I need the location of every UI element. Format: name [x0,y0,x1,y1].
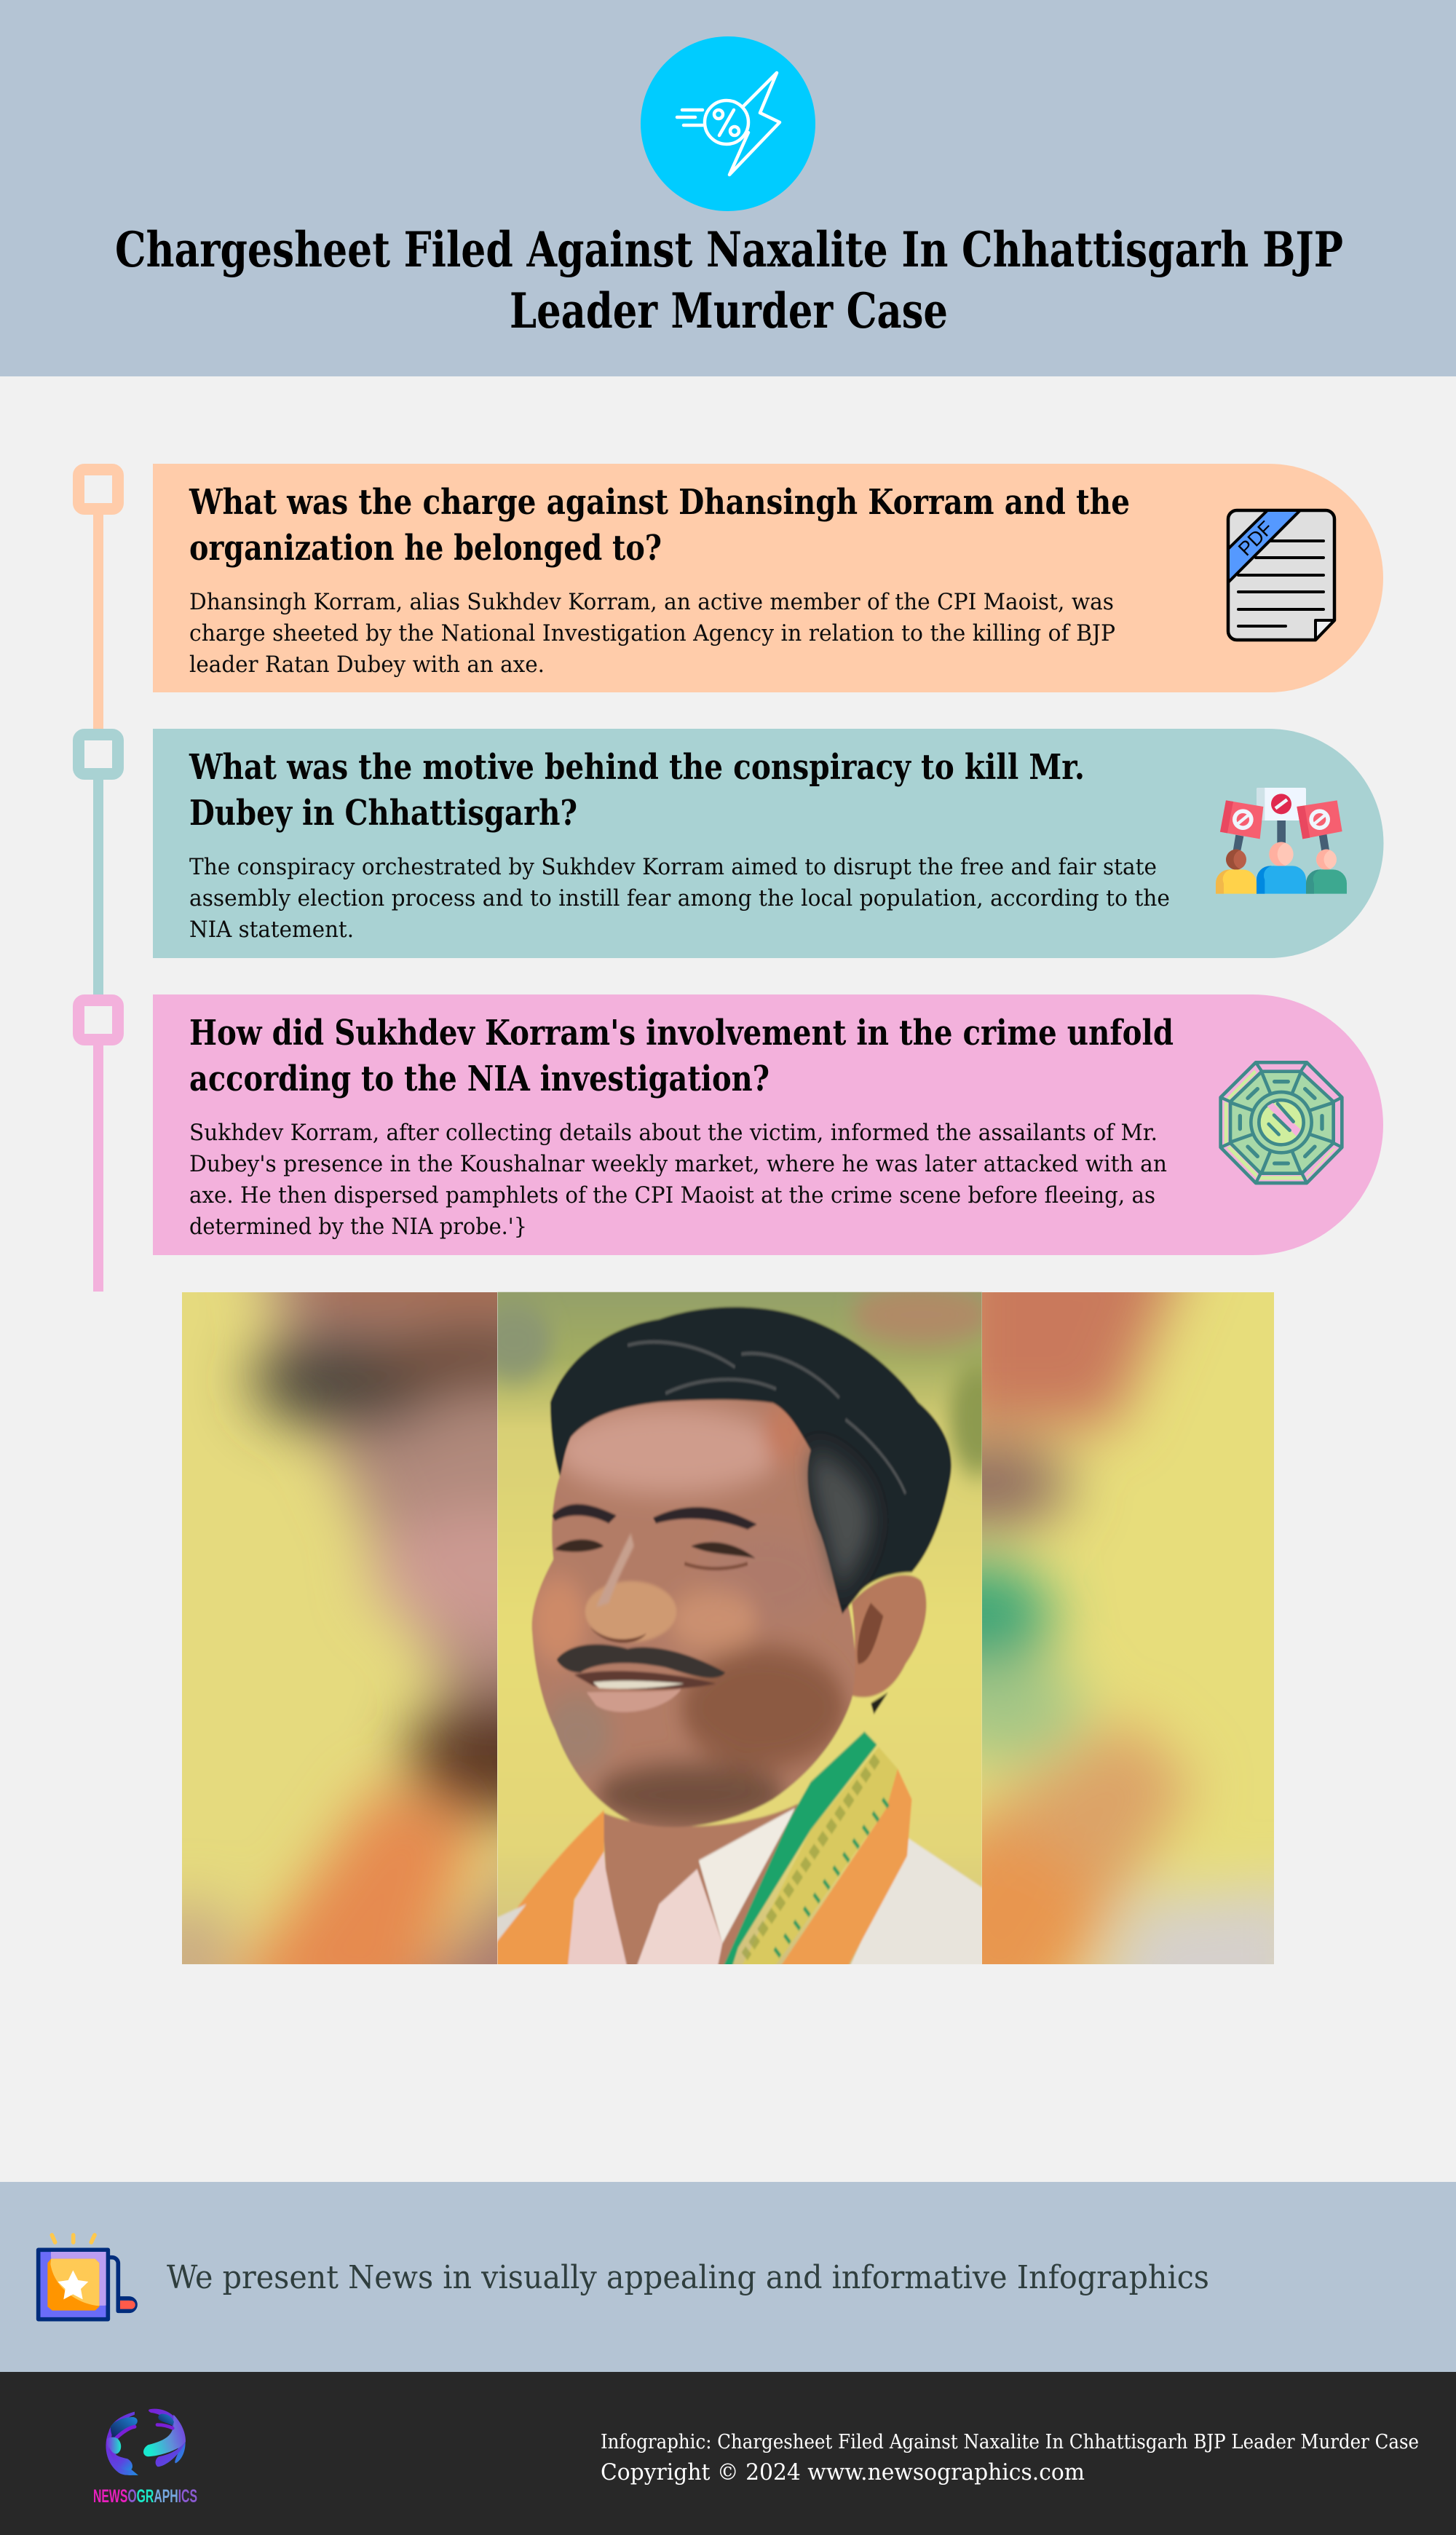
tagline band [0,2182,1456,2372]
header band [0,0,1456,376]
title: Leader Murder Case [510,282,948,339]
text: answer 2: NIA statement. [189,917,354,943]
icon: box with star [39,2235,135,2320]
mustache [557,1644,726,1678]
panel: motive [153,729,1383,958]
photo right blurred fill [982,1292,1274,1964]
heading: question 3 [189,1013,1174,1099]
photo centre portrait [497,1292,982,1964]
text: answer 1: leader Ratan Dubey with an axe. [189,652,545,678]
panel: charge [153,464,1383,692]
title [115,221,1343,339]
ear [847,1575,926,1697]
logo: newsographics [93,2409,197,2507]
footer text [601,2431,1419,2485]
text: answer 3 [189,1120,1167,1240]
neck [602,1803,798,1982]
panel: involvement [153,994,1383,1255]
nose [585,1581,676,1642]
heading: question 3: How did Sukhdev Korram's involvement in the crime unfold [189,1013,1174,1053]
text: answer 2: The conspiracy orchestrated by Sukhdev Korram aimed to disrupt the free and fair state [189,854,1157,880]
text: answer 2 [189,854,1170,943]
footer text: Copyright © 2024 www.newsographics.com [601,2459,1085,2485]
heading: question 2: Dubey in Chhattisgarh? [189,793,577,834]
heading: question 1 [189,482,1130,569]
icon: percent lightning bolt [641,36,815,211]
icon: pdf document [1228,510,1334,640]
face [532,1400,855,1827]
mouth [574,1671,716,1690]
text: answer 1 [189,589,1115,678]
heading: question 1: organization he belonged to? [189,528,662,569]
hair [550,1307,951,1614]
tagline text: We present News in visually appealing and informative Infographics [167,2259,1209,2296]
timeline marker 3 [79,1000,118,1292]
heading: question 3: according to the NIA investigation? [189,1059,769,1099]
heading: question 1: What was the charge against Dhansingh Korram and the [189,482,1130,523]
text: answer 3: Dubey's presence in the Koushalnar weekly market, where he was later attacked with an [189,1151,1167,1177]
left scarf [498,1810,605,1964]
timeline marker 1 [79,470,118,729]
icon: octagon bagua [1221,1062,1342,1183]
logo mark [106,2409,186,2475]
text: answer 3: axe. He then dispersed pamphlets of the CPI Maoist at the crime scene before fleeing, as [189,1182,1155,1209]
heading: question 2 [189,747,1085,834]
timeline marker 2 [79,735,118,994]
photo: portrait of Ratan Dubey with blurred side fills [182,1292,1274,1964]
heading: question 2: What was the motive behind the conspiracy to kill Mr. [189,747,1085,788]
eyebrows [552,1504,617,1524]
text: answer 1: charge sheeted by the National Investigation Agency in relation to the killing of BJP [189,620,1115,646]
photo left blurred fill [182,1292,497,1964]
icon: pdf document: PDF [1234,517,1277,560]
footer band [0,2372,1456,2535]
text: answer 1: Dhansingh Korram, alias Sukhdev Korram, an active member of the CPI Maoist, was [189,589,1114,615]
text: answer 3: Sukhdev Korram, after collecting details about the victim, informed the assailants of Mr. [189,1120,1158,1146]
text: answer 2: assembly election process and to instill fear among the local population, according to the [189,885,1170,911]
icon: protesters [1216,788,1347,894]
text: answer 3: determined by the NIA probe.'} [189,1214,527,1240]
eyes [555,1539,604,1552]
logo wordmark: NEWSOGRAPHICS [93,2486,197,2507]
